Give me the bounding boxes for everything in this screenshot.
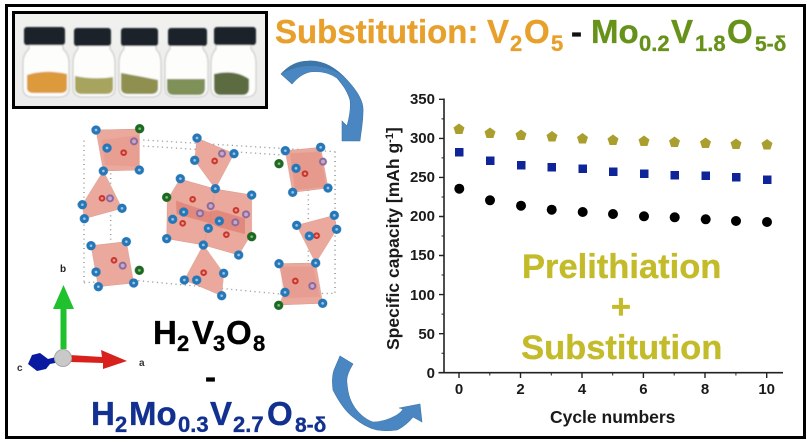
arrow: structure to capacity chart [332, 356, 422, 431]
heading: substitution formulas: Substitution: [275, 13, 478, 50]
heading: substitution formulas: O [524, 13, 550, 50]
formula: H2Mo0.3V2.7O8-δ: V [210, 395, 232, 432]
y-axis tick labels: 0 [427, 365, 435, 382]
separator dash: - [205, 358, 216, 395]
x-axis tick labels: 6 [639, 381, 648, 398]
panel: photo of five powder vials [14, 12, 266, 108]
x-axis tick labels: 2 [516, 381, 525, 398]
sites: blue [79, 127, 340, 306]
series: pentagons [454, 124, 772, 150]
series: squares [455, 148, 772, 184]
x-axis tick labels [455, 381, 775, 398]
y-axis tick labels [410, 91, 435, 382]
callout: prelithiation + substitution [521, 248, 722, 367]
heading: substitution formulas: V [671, 13, 693, 50]
heading: substitution formulas: 5 [551, 31, 563, 56]
heading: substitution formulas: V [487, 13, 509, 50]
sites: green [136, 126, 282, 308]
axis label b: b [60, 264, 66, 275]
y-axis tick labels: 200 [410, 208, 435, 225]
formula: H2Mo0.3V2.7O8-δ: O [267, 395, 293, 432]
vial 5: dark green powder [211, 27, 256, 97]
y-axis tick labels: 100 [410, 287, 435, 304]
heading: substitution formulas: Mo [591, 13, 639, 50]
y-axis title: ] [383, 127, 403, 133]
formula: H2V3O8: V [192, 314, 214, 351]
formula: H2V3O8: 2 [177, 331, 189, 356]
polyhedra [82, 129, 337, 305]
crystal structure diagram [79, 126, 340, 308]
heading: substitution formulas [275, 13, 786, 56]
axis b: green arrow [53, 285, 74, 349]
y-axis title: Specific capacity [mAh g [383, 143, 403, 350]
heading: substitution formulas: 2 [510, 31, 522, 56]
heading: substitution formulas: 0.2 [639, 31, 670, 56]
axis label c: c [17, 363, 23, 374]
arrow: vials to crystal structure [281, 61, 363, 141]
formula: H2V3O8: H [153, 314, 177, 351]
formula: H2Mo0.3V2.7O8-δ: Mo [129, 395, 177, 432]
sites: red [100, 150, 319, 283]
axis triad [17, 264, 145, 374]
axes and ticks [438, 98, 783, 378]
vial 1: orange powder [23, 27, 69, 97]
y-axis tick labels: 350 [410, 91, 435, 108]
axis label a: a [139, 358, 145, 369]
y-axis tick labels: 150 [410, 247, 435, 264]
formula: H2V3O8: 8 [253, 331, 265, 356]
y-axis tick labels: 50 [418, 326, 435, 343]
sites: purple [107, 138, 326, 289]
heading: substitution formulas: O [727, 13, 753, 50]
formula: H2Mo0.3V2.7O8-δ: 2.7 [233, 412, 264, 437]
callout: prelithiation + substitution: + [611, 288, 631, 326]
chart: specific capacity vs cycle number [383, 91, 783, 427]
x-axis tick labels: 0 [455, 381, 463, 398]
axis a: red arrow [70, 350, 127, 369]
series: circles [454, 184, 772, 227]
x-axis title: Cycle numbers [550, 407, 676, 427]
formula: H2Mo0.3V2.7O8-δ: 2 [115, 412, 127, 437]
heading: substitution formulas: 1.8 [695, 31, 726, 56]
callout: prelithiation + substitution: Prelithiation [522, 248, 721, 286]
formula: H2Mo0.3V2.7O8-δ: 0.3 [178, 412, 209, 437]
x-axis tick labels: 8 [701, 381, 709, 398]
vial 3: olive powder [119, 28, 161, 97]
formula: H2Mo0.3V2.7O8-δ: H [91, 395, 115, 432]
formula: H2V3O8: O [226, 314, 252, 351]
vial 2: khaki powder [73, 28, 115, 97]
heading: substitution formulas: - [571, 13, 582, 50]
x-axis tick labels: 10 [758, 381, 775, 398]
y-axis tick labels: 300 [410, 130, 435, 147]
callout: prelithiation + substitution: Substitution [521, 329, 722, 367]
x-axis tick labels: 4 [578, 381, 587, 398]
axis c: blue arrow [28, 353, 60, 371]
vial 4: green powder [165, 28, 208, 97]
origin sphere [54, 350, 72, 366]
formula: H2V3O8: 3 [213, 331, 225, 356]
y-axis title: -1 [384, 133, 396, 143]
y-axis tick labels: 250 [410, 169, 435, 186]
formula: H2Mo0.3V2.7O8-δ: 8-δ [295, 414, 326, 437]
heading: substitution formulas: 5-δ [755, 33, 786, 56]
